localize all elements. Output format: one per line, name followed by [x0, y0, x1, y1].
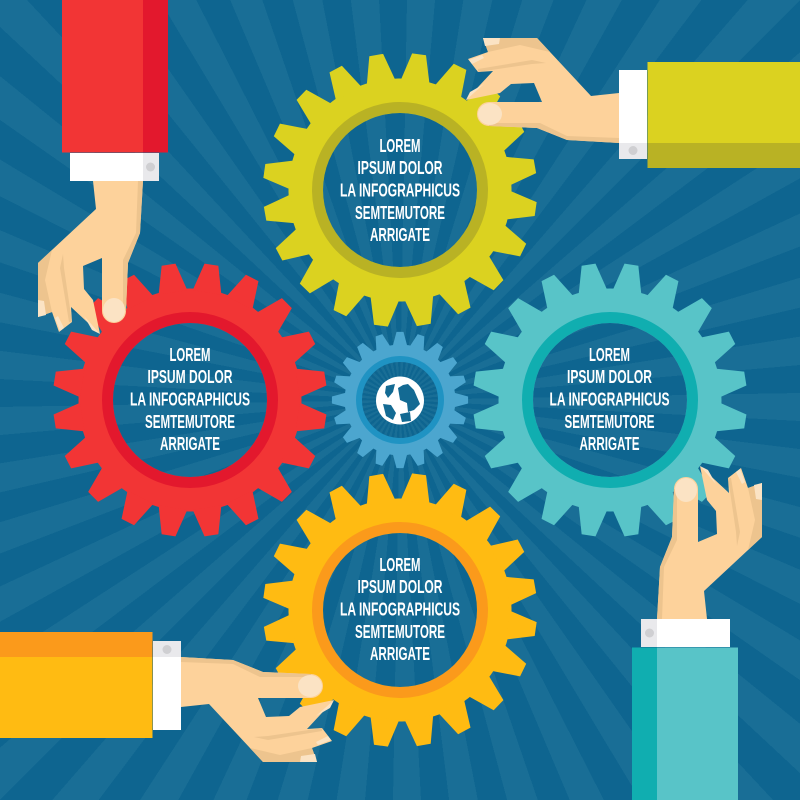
text block: top gear: ARRIGATE: [370, 225, 430, 245]
hole: top gear window showing rays: [323, 113, 477, 267]
text block: left gear: SEMTEMUTORE: [145, 412, 235, 432]
text block: bottom gear: IPSUM DOLOR: [358, 577, 442, 597]
gear: bottom amber: [260, 470, 540, 750]
gear: top olive-yellow: [260, 50, 540, 330]
hole: red gear: [113, 323, 267, 477]
text block: right gear: SEMTEMUTORE: [564, 412, 654, 432]
text block: right gear: IPSUM DOLOR: [567, 367, 652, 387]
text block: top gear: IPSUM DOLOR: [358, 158, 442, 178]
text block: left gear: IPSUM DOLOR: [148, 367, 232, 387]
hand and red sleeve, top left: [38, 0, 168, 334]
text block: bottom gear: LA INFOGRAPHICUS: [340, 600, 460, 620]
hole: centre gear with fine rays: [356, 356, 444, 444]
gear: left red: [52, 262, 328, 538]
text block: bottom gear: [340, 555, 460, 664]
hand and amber sleeve, bottom left: [0, 632, 334, 762]
text block: right gear: LA INFOGRAPHICUS: [550, 390, 670, 410]
text block: right gear: [550, 345, 670, 454]
text block: top gear: SEMTEMUTORE: [355, 203, 445, 223]
text block: bottom gear: SEMTEMUTORE: [355, 622, 445, 642]
text block: top gear: LA INFOGRAPHICUS: [340, 180, 460, 200]
text block: top gear: LOREM: [380, 136, 420, 156]
text block: left gear: LOREM: [170, 345, 210, 365]
text block: right gear: LOREM: [589, 345, 630, 365]
hole: teal gear: [533, 323, 687, 477]
gear: right teal: [472, 262, 748, 538]
text block: left gear: ARRIGATE: [160, 434, 220, 454]
text block: top gear: [340, 136, 460, 245]
text block: bottom gear: LOREM: [380, 555, 420, 575]
text block: right gear: ARRIGATE: [580, 434, 640, 454]
hand and olive sleeve, top right: [466, 38, 800, 168]
hand and teal sleeve, bottom right: [632, 466, 762, 800]
icon: globe: [376, 376, 424, 424]
text block: bottom gear: ARRIGATE: [370, 644, 430, 664]
text block: left gear: [130, 345, 250, 454]
text block: left gear: LA INFOGRAPHICUS: [130, 390, 250, 410]
hole: amber gear: [323, 533, 477, 687]
